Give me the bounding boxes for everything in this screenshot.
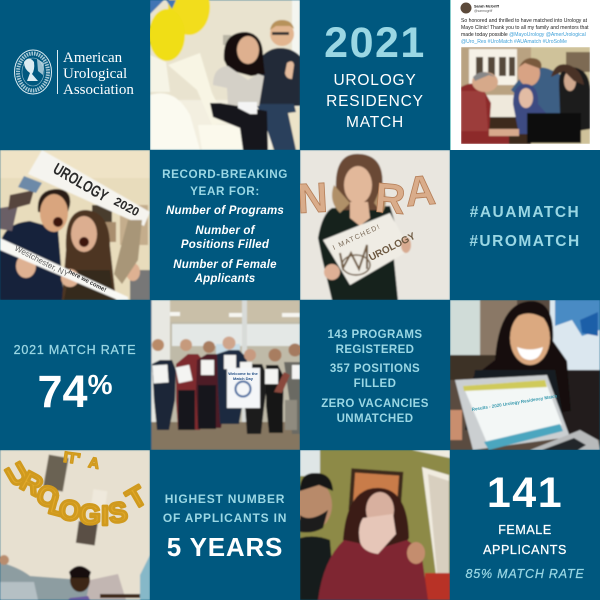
photo: couple with Urology 2020 frame: 2020 xyxy=(112,194,142,219)
photo: woman with I Matched Urology sign xyxy=(296,150,450,300)
balloon letters: U xyxy=(1,456,34,493)
panel: hashtags xyxy=(469,204,581,250)
panel: match rate xyxy=(14,343,136,417)
hashtag AUAMATCH: #AUAMATCH xyxy=(470,204,580,221)
label: 2021 MATCH RATE xyxy=(14,343,136,357)
sign text: Welcome to the xyxy=(228,371,259,376)
balloon letters: R xyxy=(373,174,407,223)
panel: programs and positions xyxy=(321,329,429,425)
balloon letters: G xyxy=(79,499,101,530)
heading: title: RESIDENCY xyxy=(326,93,424,110)
balloon letters: T xyxy=(121,480,151,515)
heading xyxy=(162,168,288,198)
stat: positions filled xyxy=(330,363,420,390)
stat: programs registered: 143 PROGRAMS xyxy=(328,329,422,341)
label: FEMALE xyxy=(498,523,552,537)
stat: programs registered xyxy=(328,329,422,356)
stat: 141: 141 xyxy=(487,469,563,517)
panel: American Urological Association logo xyxy=(14,50,134,98)
tweet photo xyxy=(461,47,590,144)
balloon letters: IT' xyxy=(62,449,81,468)
balloon letters: N xyxy=(296,174,329,222)
balloon letters: O xyxy=(32,478,63,515)
photo: couple with Urology 2020 frame: Westchester, NY xyxy=(13,244,71,279)
heading: YEAR FOR: xyxy=(190,185,260,198)
stat: zero vacancies: UNMATCHED xyxy=(337,413,413,425)
logo wordmark: Urological xyxy=(63,66,127,82)
list of records: Number of xyxy=(195,225,256,237)
photo: couple on couch with balloons xyxy=(150,0,300,150)
stat: positions filled: 357 POSITIONS xyxy=(330,363,420,375)
match rate: 85% MATCH RATE xyxy=(465,567,585,581)
logo wordmark: American xyxy=(63,50,123,66)
list of records: Number of Female xyxy=(173,259,277,271)
panel: 2021 Urology Residency Match xyxy=(324,19,426,131)
photo: couple with Urology 2020 frame: here we come! xyxy=(67,269,107,294)
heading: title xyxy=(326,72,424,131)
balloon letters xyxy=(296,166,438,223)
balloon letters: A xyxy=(87,454,101,473)
sign text: I MATCHED! xyxy=(332,224,382,252)
photo: group holding certificates: Match Day xyxy=(233,376,254,381)
stat: programs registered: REGISTERED xyxy=(336,344,414,356)
tweet text: made today possible @MayoUrology @AmerUrological xyxy=(461,32,586,38)
list of records: Number of Programs xyxy=(166,205,284,217)
tweet text: So honored and thrilled to have matched into Urology at xyxy=(461,18,588,24)
stat: zero vacancies xyxy=(321,398,429,425)
tweet text xyxy=(461,18,589,45)
photo: woman with I Matched Urology sign: UROLOGY xyxy=(367,231,418,264)
laptop screen text: Results - 2020 Urology Residency Match xyxy=(471,393,558,412)
label xyxy=(483,523,567,557)
list of records: Positions Filled xyxy=(181,239,270,251)
photo: couple reacting on video call xyxy=(300,450,450,600)
panel: record-breaking year xyxy=(162,168,288,285)
photo: It's a Urologist gold balloons xyxy=(0,449,151,600)
hashtag UROMATCH: #UROMATCH xyxy=(469,233,581,250)
heading: year: 2021 xyxy=(324,19,426,67)
tweet author: Sarah McGriff xyxy=(474,4,500,8)
stat: 5 years: 5 YEARS xyxy=(167,532,283,562)
logo wordmark xyxy=(63,50,134,98)
photo: couple with Urology 2020 frame xyxy=(0,150,150,300)
stat: 74 percent: % xyxy=(88,369,113,400)
list of records: Applicants xyxy=(194,273,255,285)
description: OF APPLICANTS IN xyxy=(163,511,287,525)
panel: female applicants xyxy=(465,469,585,581)
description: HIGHEST NUMBER xyxy=(165,492,285,506)
balloon letters: L xyxy=(46,488,70,523)
balloon letters: O xyxy=(56,493,83,528)
list of records xyxy=(166,205,284,285)
balloon letters: S xyxy=(107,496,129,529)
heading: RECORD-BREAKING xyxy=(162,168,288,181)
tweet author xyxy=(474,4,500,13)
description xyxy=(163,492,287,525)
balloon letters: A xyxy=(403,166,438,215)
stat: 74 percent: 74 xyxy=(38,366,88,417)
divider xyxy=(57,50,58,94)
icon: AUA seal xyxy=(14,50,52,94)
panel: tweet xyxy=(450,0,600,150)
photo: woman with laptop xyxy=(450,300,600,450)
heading: title: MATCH xyxy=(346,114,404,131)
banner text: UROLOGY xyxy=(50,159,112,205)
panel: highest number of applicants xyxy=(163,492,287,562)
balloon letters: I xyxy=(101,500,109,531)
heading: title: UROLOGY xyxy=(333,72,417,89)
tweet text: @Uro_Res #UroMatch #AUAmatch #UroSoMe xyxy=(461,39,567,45)
logo wordmark: Association xyxy=(63,82,134,98)
tweet author: @sarmcgriff xyxy=(474,9,492,13)
balloon letters xyxy=(1,449,151,531)
stat: positions filled: FILLED xyxy=(354,378,396,390)
icon: avatar xyxy=(460,2,472,14)
tweet text: Mayo Clinic! Thank you to all my family and mentors that xyxy=(461,25,589,31)
stat: zero vacancies: ZERO VACANCIES xyxy=(321,398,429,410)
label: APPLICANTS xyxy=(483,543,567,557)
balloon letters: R xyxy=(16,465,48,502)
photo: group holding certificates xyxy=(150,300,300,450)
